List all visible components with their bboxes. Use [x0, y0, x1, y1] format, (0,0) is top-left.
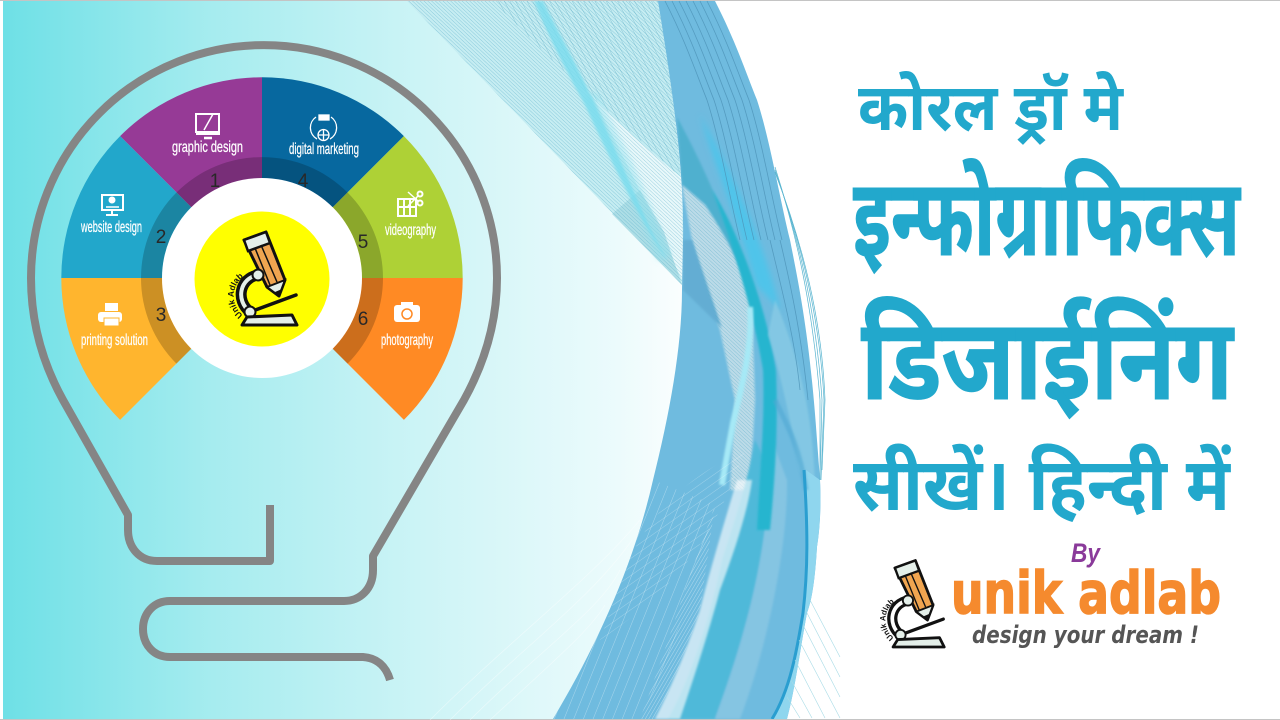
- white hub: [162, 178, 362, 378]
- number 1: 1: [210, 171, 220, 192]
- brand logo block: [880, 538, 1221, 649]
- number 2: 2: [156, 227, 166, 248]
- icon: digital marketing: [310, 115, 337, 140]
- wave: blue silhouette: [553, 1, 820, 719]
- icon: monitor with pen: [196, 114, 220, 138]
- segment: digital marketing: [262, 77, 404, 278]
- bulb outline: [31, 45, 497, 680]
- label: photography: photography: [381, 332, 433, 349]
- inner dark ring: [141, 157, 383, 364]
- by label: By: [1071, 538, 1102, 568]
- icon: film and scissors: [398, 192, 422, 216]
- yellow disc: [194, 212, 330, 346]
- label: graphic design: graphic design: [172, 139, 243, 156]
- heading line 1: कोरल ड्रॉ मे: [858, 70, 1124, 145]
- tagline: design your dream !: [972, 621, 1199, 649]
- logo: pencil microscope small: [880, 559, 946, 648]
- label: website design: website design: [80, 219, 142, 236]
- label: digital marketing: digital marketing: [289, 141, 359, 158]
- decorative wave: [407, 1, 840, 720]
- logo: pencil microscope: Unik Adlab: [228, 274, 242, 319]
- number 4: 4: [298, 171, 309, 192]
- number 5: 5: [358, 232, 368, 253]
- segment: videography: [262, 136, 463, 278]
- icon: printer: [98, 303, 122, 326]
- label: videography: videography: [385, 222, 436, 239]
- segment: photography: [262, 278, 463, 420]
- segment: graphic design: [120, 77, 262, 278]
- segment: printing solution: [61, 278, 262, 420]
- heading line 4: सीखें। हिन्दी में: [853, 443, 1232, 526]
- wheel: [61, 77, 463, 420]
- icon: website monitor: [102, 195, 123, 215]
- logo: pencil microscope small: Unik Adlab: [880, 600, 894, 642]
- segment: website design: [61, 136, 262, 278]
- number 6: 6: [358, 309, 368, 330]
- icon: camera: [394, 302, 420, 322]
- number 3: 3: [156, 305, 166, 326]
- label: printing solution: printing solution: [81, 332, 148, 349]
- logo: pencil microscope: [228, 230, 299, 326]
